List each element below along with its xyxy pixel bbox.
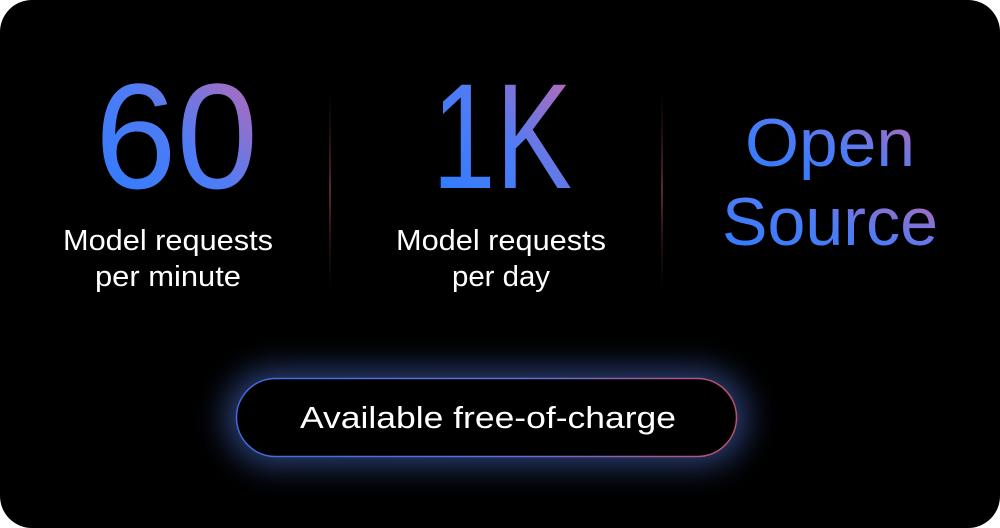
stat: Open Source [722,105,938,260]
stat: 60 per minute [63,52,273,293]
stat: 1K per day: per day [452,261,551,293]
stat: 60 per minute: per minute [95,261,241,293]
stat: Open Source: Open [745,105,915,181]
button: available free-of-charge [226,370,747,465]
stat: 1K per day: Model requests [396,225,606,257]
stat: 60 per minute: Model requests [63,225,273,257]
stat: 60 per minute: 60 [95,52,258,220]
stat: 1K per day: 1K [432,52,572,220]
button: available free-of-charge: Available free-of-charge [300,400,676,435]
stat: Open Source: Source [722,184,938,260]
stat: 1K per day [396,52,606,293]
